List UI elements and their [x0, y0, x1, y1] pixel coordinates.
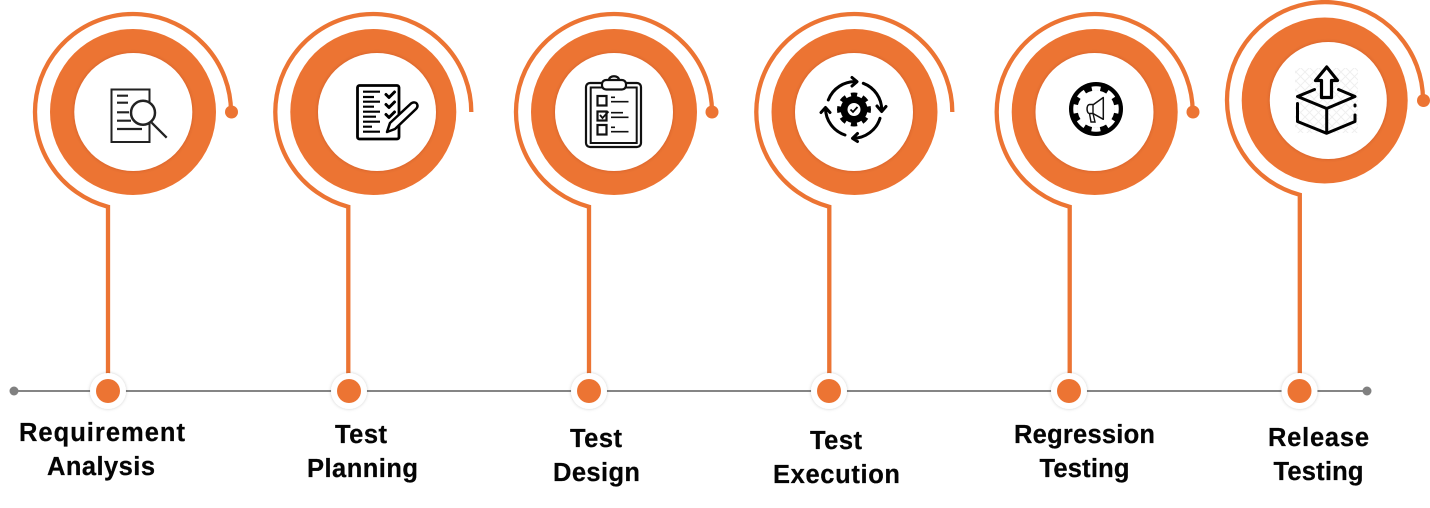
label: Testing — [1274, 458, 1364, 486]
connector arc and stem — [275, 14, 471, 378]
step 1: Requirement Analysis — [19, 14, 238, 481]
timeline node — [331, 373, 367, 409]
white centre — [1036, 53, 1154, 171]
timeline node — [1051, 373, 1087, 409]
step 3: Test Design — [516, 14, 718, 487]
orange ring — [772, 29, 938, 195]
arc end dot — [1186, 106, 1200, 118]
timeline node — [571, 373, 607, 409]
step 4: Test Execution — [756, 14, 952, 489]
orange ring — [1012, 29, 1178, 195]
white centre — [74, 53, 192, 171]
icon: clipboard checklist — [586, 76, 641, 147]
orange ring — [531, 29, 697, 195]
label: Analysis — [47, 453, 155, 481]
label: Design — [553, 459, 640, 487]
connector arc and stem — [35, 14, 231, 378]
orange ring — [50, 29, 216, 195]
arc end dot — [225, 106, 238, 118]
label: Test — [570, 425, 622, 453]
step 2: Test Planning — [275, 14, 471, 483]
icon: checklist with pencil — [358, 86, 418, 139]
icon: document with magnifier — [112, 90, 167, 142]
white centre — [795, 53, 913, 171]
timeline node — [1282, 373, 1318, 409]
label: Regression — [1014, 421, 1155, 449]
label: Test — [810, 427, 862, 455]
label: Execution — [773, 461, 900, 489]
arc end dot — [1417, 94, 1430, 107]
label: Test — [335, 421, 388, 449]
connector arc and stem — [516, 14, 712, 378]
connector arc and stem — [997, 14, 1193, 378]
connector arc and stem — [756, 14, 952, 378]
label: Testing — [1040, 455, 1130, 483]
label: Planning — [307, 455, 418, 483]
icon: gear with cycle arrows — [821, 78, 886, 142]
white centre — [318, 53, 436, 171]
step 6: Release Testing — [1227, 2, 1430, 486]
timeline node — [90, 373, 126, 409]
timeline axis — [10, 386, 1372, 396]
orange ring — [290, 29, 456, 195]
label: Requirement — [19, 419, 186, 447]
timeline node — [811, 373, 847, 409]
connector arc and stem — [1227, 2, 1423, 378]
step 5: Regression Testing — [997, 14, 1200, 483]
orange ring — [1242, 18, 1408, 184]
label: Release — [1268, 424, 1369, 452]
icon: gear badge with megaphone — [1069, 82, 1123, 136]
white centre — [555, 53, 673, 171]
icon: open box with up arrow — [1295, 67, 1358, 133]
white centre — [1270, 42, 1387, 159]
arc end dot — [706, 106, 718, 118]
